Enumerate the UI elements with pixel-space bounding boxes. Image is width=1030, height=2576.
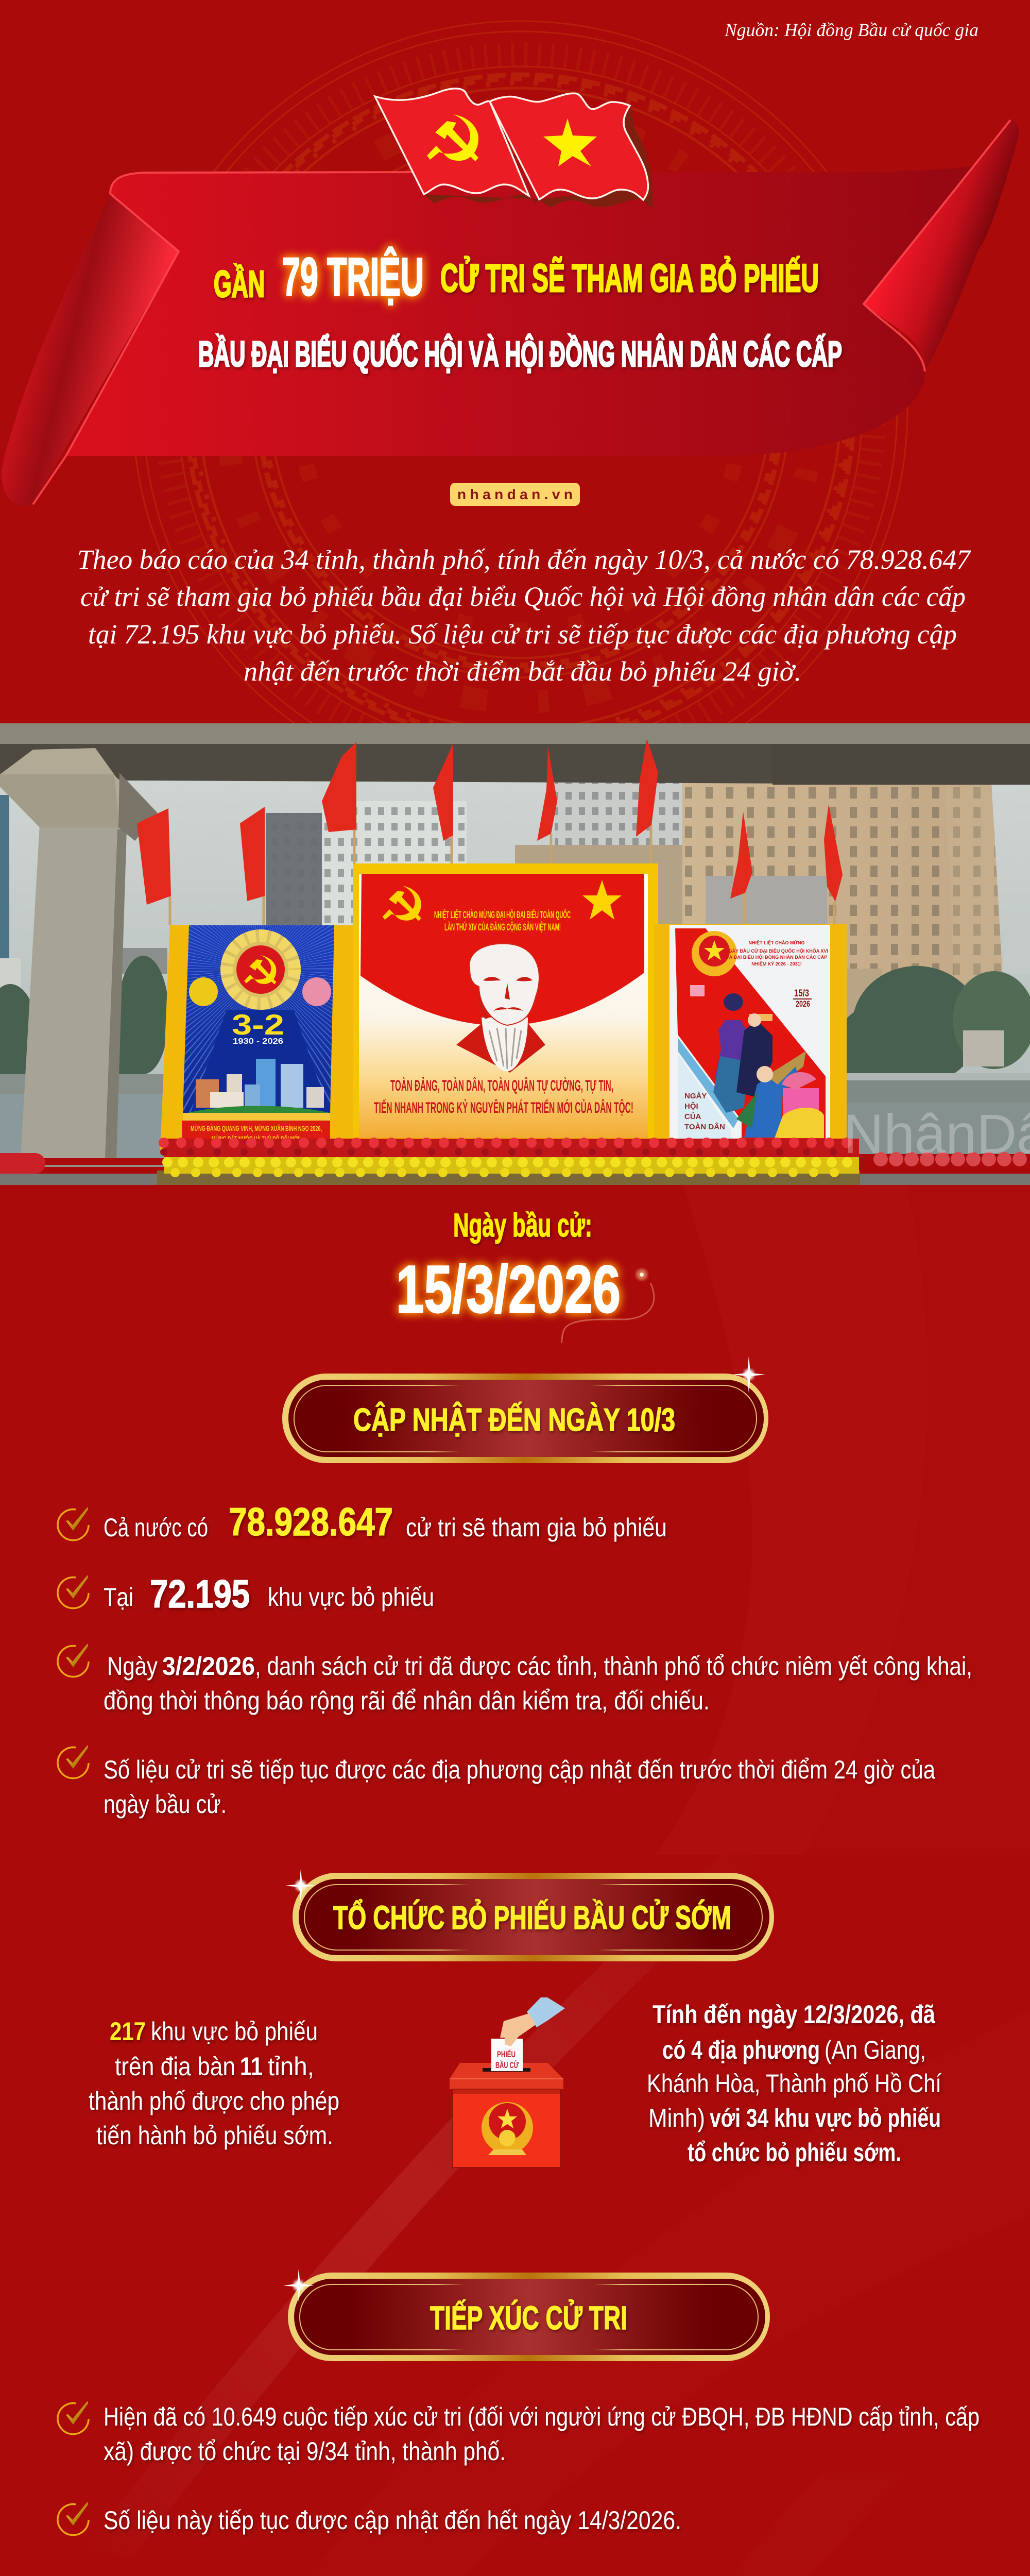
right poster: election day: 15/3 [794,988,809,999]
early voting right text: có 4 địa phương [662,2036,820,2064]
bullet: 72.195 polling areas [58,1572,434,1616]
poster slogan: TOÀN ĐẢNG, TOÀN DÂN, TOÀN QUÂN TỰ CƯỜNG, TỰ TIN, [390,1077,613,1094]
poster red banner [182,1121,330,1147]
poster slogan vertical: HỘI [684,1101,698,1111]
early voting left text: tiến hành bỏ phiếu sớm. [96,2121,333,2150]
intro paragraph: tại 72.195 khu vực bỏ phiếu. Số liệu cử tri sẽ tiếp tục được các địa phương cập [88,619,957,650]
title highlight: 79 triệu: 79 TRIỆU [282,247,424,307]
early voting left text: 217 [110,2017,146,2046]
box lid [450,2063,563,2089]
left poster: 3-2 party anniversary: MỪNG ĐẢNG QUANG VINH, MỪNG XUÂN BÍNH NGỌ 2026, [191,1124,322,1132]
left poster: 3-2 party anniversary: MỪNG ĐẤT NƯỚC VÀ THỦ ĐÔ ĐỔI MỚI! [212,1134,301,1143]
river embankment and water [0,1073,1030,1158]
election date label: Ngày bầu cử: [453,1207,592,1244]
ribbon highlight edges [33,120,1010,504]
election date: 15/3/2026 [396,1251,621,1327]
bullet: 10.649 meetings [58,2401,980,2466]
early voting left text: trên địa bàn [115,2052,235,2081]
title line 1: Gần: GẦN [214,263,265,305]
pill heading text: TIẾP XÚC CỬ TRI [430,2299,627,2336]
icon: gold check [58,1507,89,1540]
early voting right text [647,2000,941,2167]
bullet: 78.928.647 voters: cử tri sẽ tham gia bỏ phiếu [406,1513,667,1542]
bullet list: voter statistics [58,1500,972,1819]
poster header text: NHIỆT LIỆT CHÀO MỪNG [749,940,804,945]
bullet: updated until 14/3: Số liệu này tiếp tục được cập nhật đến hết ngày 14/3/2026. [104,2506,681,2535]
early voting right text: Minh) [648,2104,705,2132]
icon: gold check [58,1745,89,1778]
ballot paper: BẦU CỬ [495,2060,519,2070]
left poster: 3-2 party anniversary: 1930 - 2026 [233,1037,283,1046]
title line 1 remainder: CỬ TRI SẼ THAM GIA BỎ PHIẾU [440,257,819,300]
centre poster: Ho Chi Minh portrait: TIẾN NHANH TRONG KỶ NGUYÊN PHÁT TRIỂN MỚI CỦA DÂN TỘC! [374,1099,633,1116]
poster figures [690,985,824,1138]
bullet: 72.195 polling areas: 72.195 [150,1572,250,1616]
poster header text: VÀ ĐẠI BIỂU HỘI ĐỒNG NHÂN DÂN CÁC CẤP [726,954,827,960]
sparkle swoosh [561,1269,654,1343]
bullet: figures keep updating [58,1745,935,1819]
poster header text: NHIỆM KỲ 2026 - 2031! [751,961,802,967]
poster flower medallion [220,929,301,1010]
early voting right text: tổ chức bỏ phiếu sớm. [688,2138,901,2167]
poster date text: 3-2 [232,1008,284,1041]
background buildings [0,782,1030,1030]
bullet: 78.928.647 voters: Cả nước có [104,1513,208,1542]
icon: gold check [58,2401,89,2434]
red flags on poles [137,739,843,925]
sparkle [283,2269,314,2302]
right poster: election day: 2026 [796,999,810,1009]
icon: yellow star [543,118,597,166]
bullet: 72.195 polling areas: khu vực bỏ phiếu [268,1583,434,1612]
poster slogan vertical: CỦA [684,1112,701,1121]
early voting left text: 11 [240,2052,263,2081]
box emblem [482,2102,533,2155]
centre poster: Ho Chi Minh portrait [353,863,658,1142]
ballot paper: PHIẾU [497,2049,516,2059]
centre poster: Ho Chi Minh portrait: NHIỆT LIỆT CHÀO MỪNG ĐẠI HỘI ĐẠI BIỂU TOÀN QUỐC [434,909,571,921]
sparkle [285,1869,316,1902]
flag depth shadow [424,106,653,209]
left poster: 3-2 party anniversary [158,867,364,1150]
section pill: voter contact [283,2269,770,2361]
national flag [490,93,648,200]
portrait illustration [456,943,545,1073]
bullet: figures keep updating: ngày bầu cử. [104,1790,227,1819]
ribbon banner [2,120,1019,506]
trees [0,956,1030,1074]
nhandan.vn badge: nhandan.vn [457,486,573,502]
hand [500,2013,536,2046]
banner title [198,247,842,374]
bullet: voter list posted: Ngày [107,1652,158,1681]
icon: ballot box with hand [450,1997,565,2167]
early voting left text: thành phố được cho phép [89,2087,339,2115]
source line: Nguồn: Hội đồng Bầu cử quốc gia [724,20,978,40]
sleeve [527,1997,565,2027]
sky [0,781,1030,1074]
icon: hammer and sickle [427,114,478,161]
concrete pillar [0,748,158,1158]
early voting right text: Tính đến ngày 12/3/2026, đã [653,2000,935,2029]
pill heading text: TỔ CHỨC BỎ PHIẾU BẦU CỬ SỚM [333,1899,731,1936]
early voting left text: tỉnh, [268,2052,314,2081]
ribbon left tail [2,194,179,506]
section pill: update to 10/3 [282,1356,768,1463]
lower background curtain swooshes [77,1185,1030,2576]
intro paragraph: cử tri sẽ tham gia bỏ phiếu bầu đại biểu Quốc hội và Hội đồng nhân dân các cấp [80,581,966,612]
party flag [375,89,529,196]
pill heading text: CẬP NHẬT ĐẾN NGÀY 10/3 [353,1402,675,1438]
poster slogan vertical: NGÀY [684,1092,707,1100]
poster slogan vertical [684,1092,725,1131]
emblem background pattern [133,21,907,796]
bullet: 72.195 polling areas: Tại [104,1583,133,1612]
poster emblem [692,931,737,976]
centre poster: Ho Chi Minh portrait: LẦN THỨ XIV CỦA ĐẢNG CỘNG SẢN VIỆT NAM! [444,922,561,933]
bullet: voter list posted: 3/2/2026 [162,1652,255,1681]
nhandan.vn badge [450,483,580,506]
poster city buildings [188,1059,330,1113]
flags [375,89,653,209]
bullet: voter list posted [58,1643,972,1715]
poster header text: NGÀY BẦU CỬ ĐẠI BIỂU QUỐC HỘI KHÓA XVI [725,948,828,954]
intro paragraph: nhật đến trước thời điểm bắt đầu bỏ phiếu 24 giờ. [244,656,801,687]
icon: gold check [58,1643,89,1677]
bullet: voter list posted: đồng thời thông báo rộng rãi để nhân dân kiểm tra, đối chiếu. [104,1686,710,1715]
railway beam [0,723,1030,785]
intro paragraph: Theo báo cáo của 34 tỉnh, thành phố, tính đến ngày 10/3, cả nước có 78.928.647 [77,544,971,575]
poster slogan vertical: TOÀN DÂN [684,1122,725,1131]
ground and flower beds [0,1143,1030,1185]
section pill: early voting [285,1869,774,1961]
ribbon main panel [66,166,972,456]
poster header text [725,940,828,967]
intro paragraph [77,544,971,687]
bullet: 78.928.647 voters: 78.928.647 [229,1500,393,1544]
early voting right text: (An Giang, [825,2036,926,2064]
right poster: election day [655,924,847,1143]
early voting left text [89,2017,339,2150]
box body [453,2089,560,2167]
icon: gold check [58,2502,89,2535]
bullet list: voter contact [58,2401,980,2535]
slot [483,2068,530,2072]
icon: gold check [58,1575,89,1608]
bullet: 78.928.647 voters [58,1500,667,1544]
sparkle [732,1356,765,1393]
ribbon right tail [864,120,1019,371]
photo: election posters under the elevated railway [0,723,1030,1185]
bullet: 10.649 meetings: xã) được tổ chức tại 9/34 tỉnh, thành phố. [104,2437,506,2466]
early voting right text: với 34 khu vực bỏ phiếu [710,2104,941,2132]
ballot paper [491,2039,523,2071]
early voting left text: khu vực bỏ phiếu [151,2017,318,2046]
early voting right text: Khánh Hòa, Thành phố Hồ Chí [647,2069,941,2098]
